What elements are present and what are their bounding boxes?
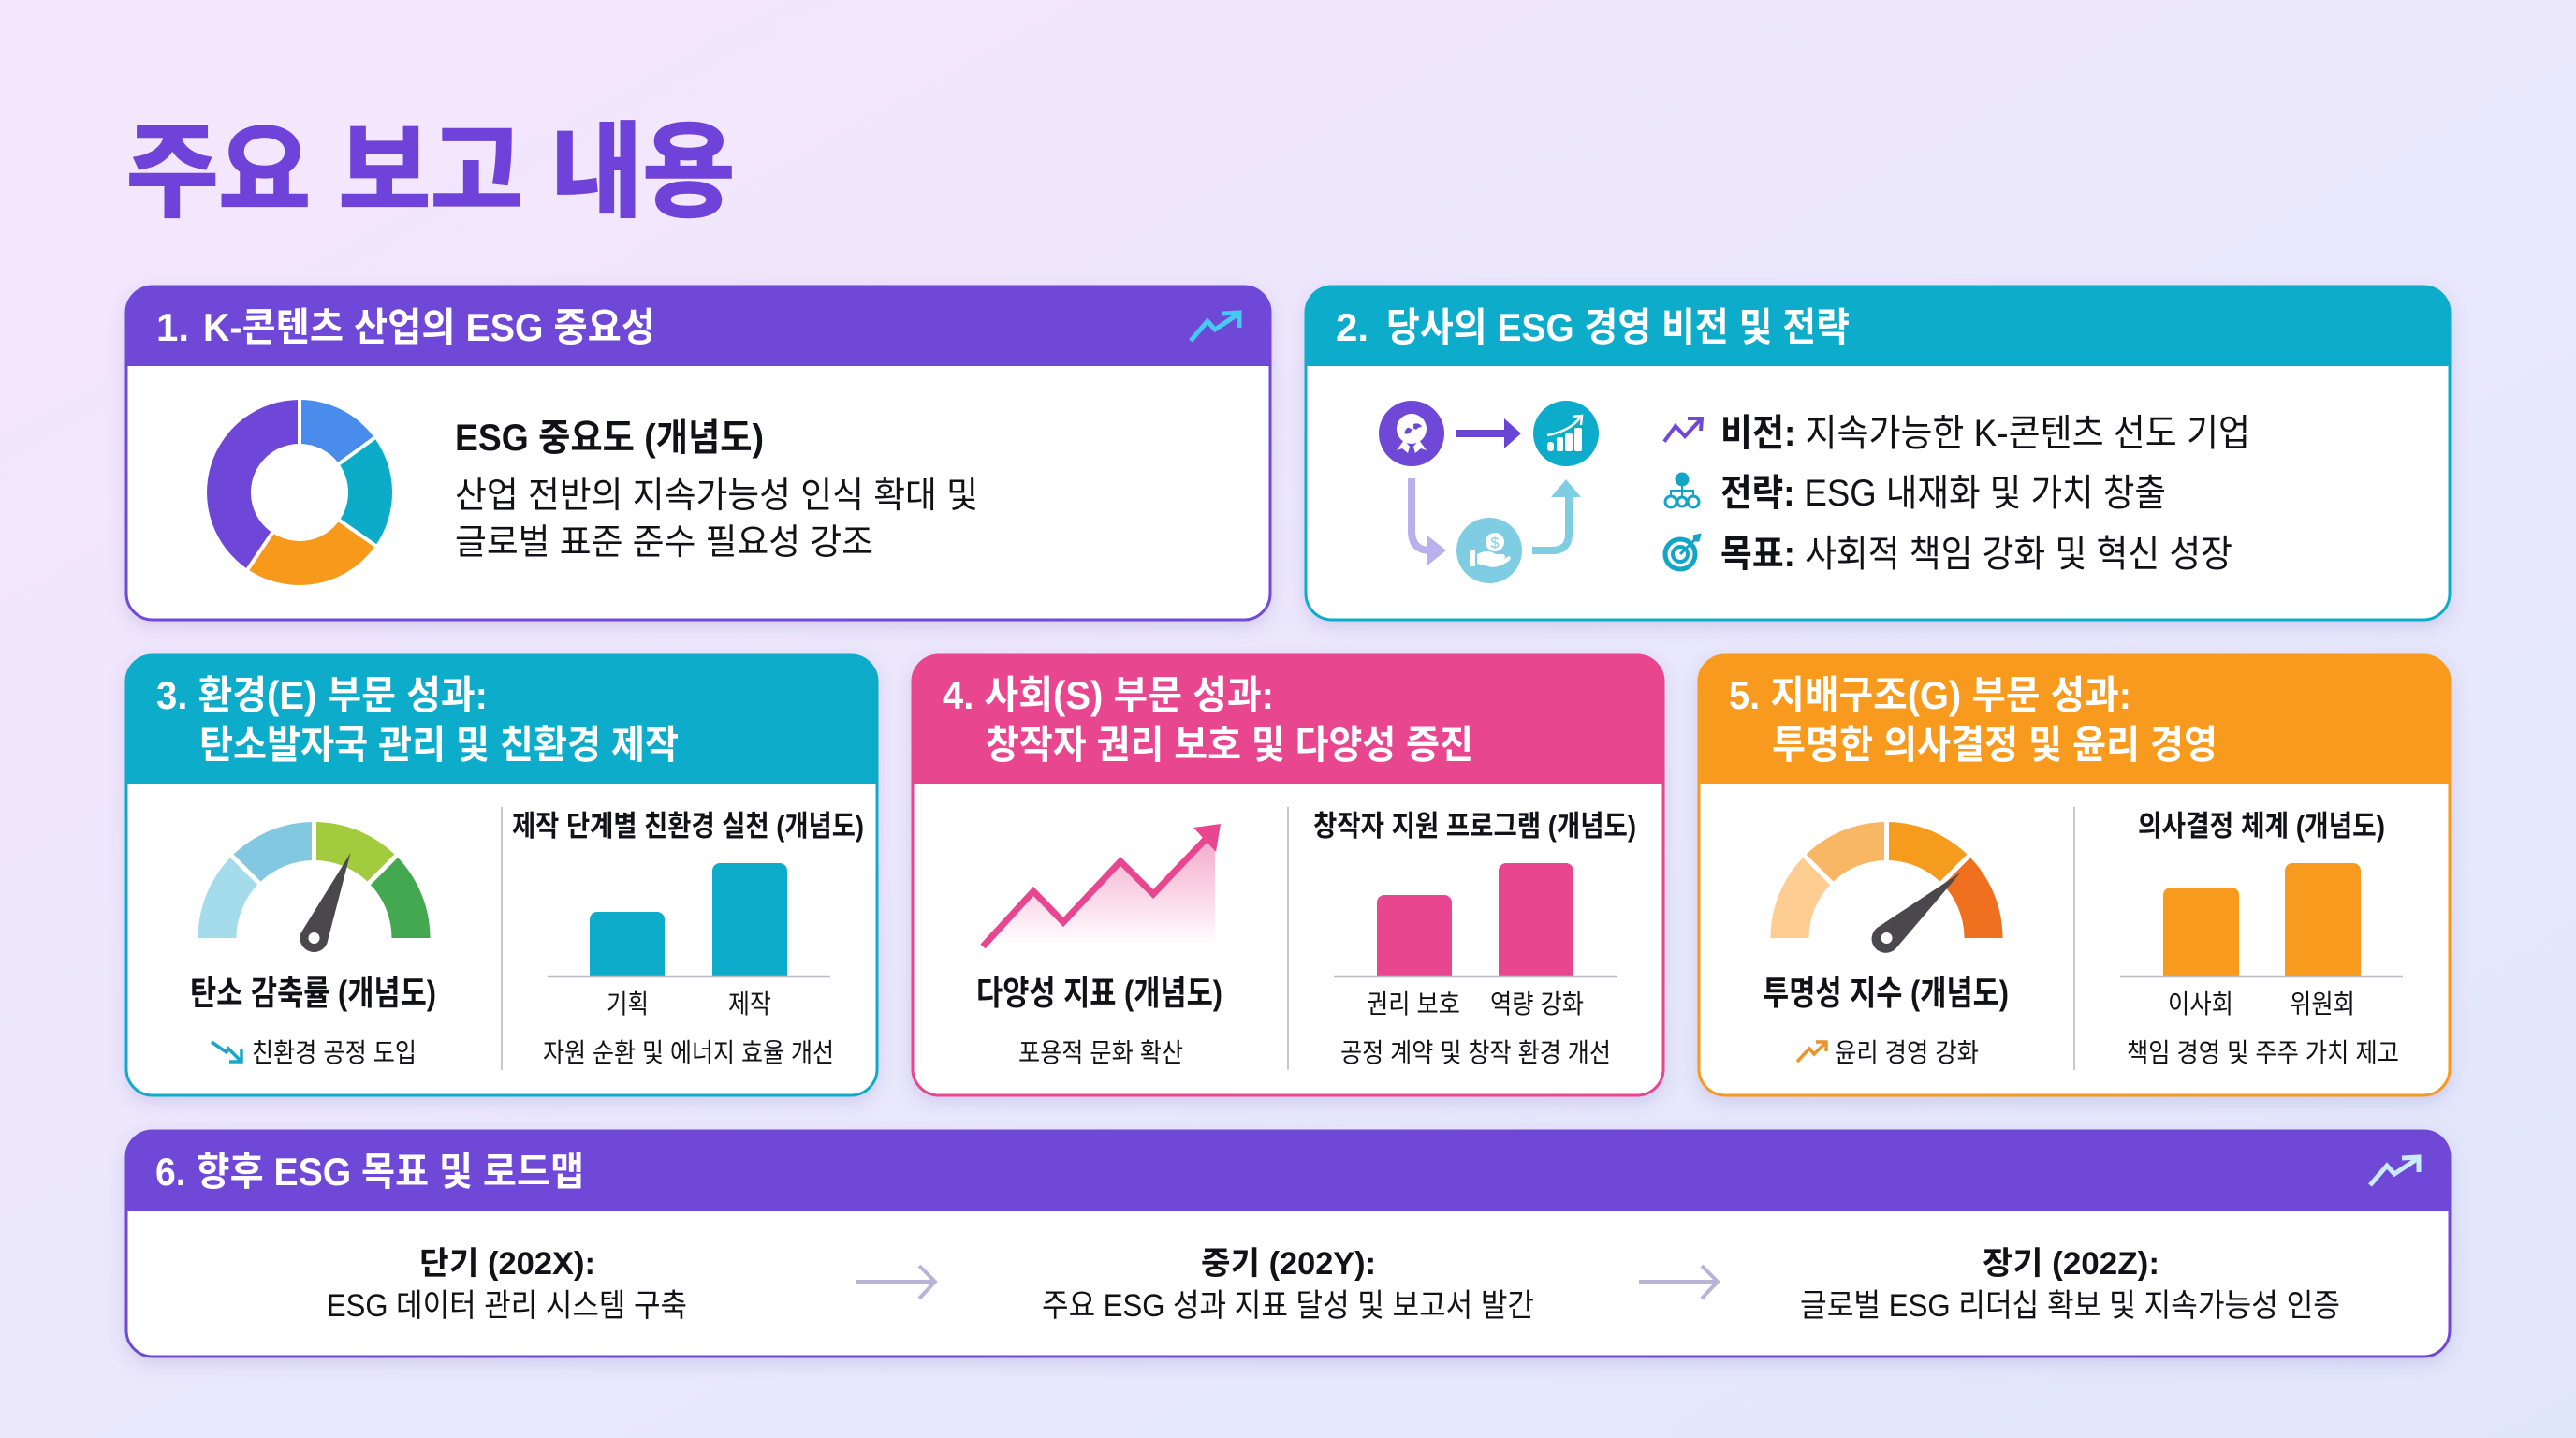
roadmap: long term: [1800, 1246, 2340, 1324]
bar chart caption: 자원 순환 및 에너지 효율 개선: [543, 1038, 834, 1067]
bar chart: decision system: 위원회: [2290, 990, 2355, 1019]
strategy row: [1665, 473, 2166, 514]
bar chart: decision system: [2120, 810, 2403, 1019]
gauge caption: [1797, 1038, 1979, 1067]
gauge chart: transparency: [1771, 819, 2003, 953]
icon: org tree: [1665, 474, 1699, 507]
panel: 4. Social: [912, 654, 1664, 1095]
gauge caption: [212, 1038, 417, 1067]
panel 4 heading: [943, 673, 1473, 767]
donut text block: 산업 전반의 지속가능성 인식 확대 및: [455, 477, 978, 516]
donut text block: ESG 중요도 (개념도): [455, 418, 764, 459]
arrow: lilac down-right: [1412, 478, 1446, 565]
bar chart: creator support: 권리 보호: [1367, 990, 1460, 1019]
bar chart: eco production: 제작: [728, 990, 771, 1019]
panel 4 heading: 4. 사회(S) 부문 성과:: [943, 673, 1274, 717]
arrow: short to mid: [856, 1266, 935, 1299]
panel 2 heading: 당사의 ESG 경영 비전 및 전략: [1386, 305, 1850, 349]
bar chart: eco production: 기획: [607, 990, 649, 1019]
panel 5 heading: 투명한 의사결정 및 윤리 경영: [1772, 723, 2217, 767]
roadmap: long term: 장기 (202Z):: [1983, 1246, 2159, 1282]
icon: target: [1665, 534, 1701, 569]
icon: award badge: [1379, 401, 1444, 466]
strategy text: 전략: ESG 내재화 및 가치 창출: [1720, 473, 2166, 514]
panel 3 heading: 3. 환경(E) 부문 성과:: [156, 673, 488, 717]
icon: hand with coin: $: [1491, 536, 1500, 551]
panel 1 header bar: [125, 286, 1271, 366]
bar chart: creator support: [1313, 810, 1636, 1019]
panel 4 heading: 창작자 권리 보호 및 다양성 증진: [986, 723, 1473, 767]
panel 5 header bar: [1698, 654, 2451, 784]
icon: trend arrow: [1191, 313, 1239, 341]
panel: 2. ESG vision and strategy: [1305, 286, 2451, 620]
gauge chart: carbon: [198, 819, 431, 952]
roadmap: short term: 단기 (202X):: [419, 1246, 595, 1282]
panel 2 heading: 2.: [1336, 305, 1368, 349]
panel 5 heading: [1729, 673, 2217, 767]
icon: vision trend: [1664, 418, 1702, 442]
vision text: 비전: 지속가능한 K-콘텐츠 선도 기업: [1720, 413, 2250, 454]
gauge label: 탄소 감축률 (개념도): [190, 974, 436, 1012]
caption text: 윤리 경영 강화: [1835, 1038, 1979, 1067]
panel: 1. ESG importance: [125, 286, 1271, 620]
roadmap: short term: ESG 데이터 관리 시스템 구축: [327, 1288, 687, 1324]
panel: 5. Governance: [1698, 654, 2451, 1095]
bar chart: eco production: 제작 단계별 친환경 실천 (개념도): [512, 810, 864, 843]
bar chart: decision system: 이사회: [2168, 990, 2233, 1019]
panel 3 heading: 탄소발자국 관리 및 친환경 제작: [199, 723, 679, 767]
roadmap: short term: [327, 1246, 687, 1324]
panel 1 heading: 1.: [156, 305, 189, 349]
goal row: [1665, 534, 2232, 575]
bar chart: decision system: 의사결정 체계 (개념도): [2138, 810, 2385, 843]
donut text block: [455, 418, 978, 563]
panel 6 heading: 6. 향후 ESG 목표 및 로드맵: [155, 1150, 584, 1194]
goal text: 목표: 사회적 책임 강화 및 혁신 성장: [1720, 534, 2232, 575]
bar chart caption: 공정 계약 및 창작 환경 개선: [1340, 1038, 1611, 1067]
bar chart caption: 책임 경영 및 주주 가치 제고: [2127, 1038, 2399, 1067]
icon: trend down: [212, 1042, 242, 1062]
line chart: diversity: [983, 824, 1221, 946]
arrow: purple right: [1456, 418, 1521, 448]
caption text: 친환경 공정 도입: [252, 1038, 417, 1067]
line chart caption: 포용적 문화 확산: [1018, 1038, 1183, 1067]
panel 6 header bar: [125, 1130, 2451, 1211]
bar chart: eco production: [512, 810, 864, 1019]
panel 3 heading: [156, 673, 679, 767]
roadmap: mid term: [1042, 1246, 1534, 1324]
roadmap: mid term: 중기 (202Y):: [1201, 1246, 1376, 1282]
title: 주요 보고 내용: [126, 115, 735, 230]
panel 4 header bar: [912, 654, 1664, 784]
icon: trend arrow: [2370, 1157, 2419, 1185]
vision row: [1664, 413, 2250, 454]
panel 2 header bar: [1305, 286, 2451, 366]
panel 3 header bar: [125, 654, 878, 784]
panel 1 heading: K-콘텐츠 산업의 ESG 중요성: [203, 305, 655, 349]
bar chart: creator support: 창작자 지원 프로그램 (개념도): [1313, 810, 1636, 843]
icon: trend up: [1797, 1042, 1826, 1062]
panel: 6. Roadmap: [125, 1130, 2451, 1357]
arrow: mid to long: [1639, 1266, 1718, 1299]
gauge label: 투명성 지수 (개념도): [1763, 974, 2009, 1012]
bar chart: creator support: 역량 강화: [1490, 990, 1584, 1019]
panel 5 heading: 5. 지배구조(G) 부문 성과:: [1729, 673, 2131, 717]
line chart label: 다양성 지표 (개념도): [976, 974, 1222, 1012]
roadmap: long term: 글로벌 ESG 리더십 확보 및 지속가능성 인증: [1800, 1288, 2340, 1324]
flow diagram: [1379, 401, 1599, 583]
panel: 3. Environment: [125, 654, 878, 1095]
arrow: blue up: [1532, 479, 1581, 550]
icon: hand with coin: [1456, 518, 1522, 583]
roadmap: mid term: 주요 ESG 성과 지표 달성 및 보고서 발간: [1042, 1288, 1534, 1324]
donut chart: [207, 398, 392, 585]
donut text block: 글로벌 표준 준수 필요성 강조: [455, 523, 873, 563]
icon: growth chart: [1533, 401, 1599, 466]
